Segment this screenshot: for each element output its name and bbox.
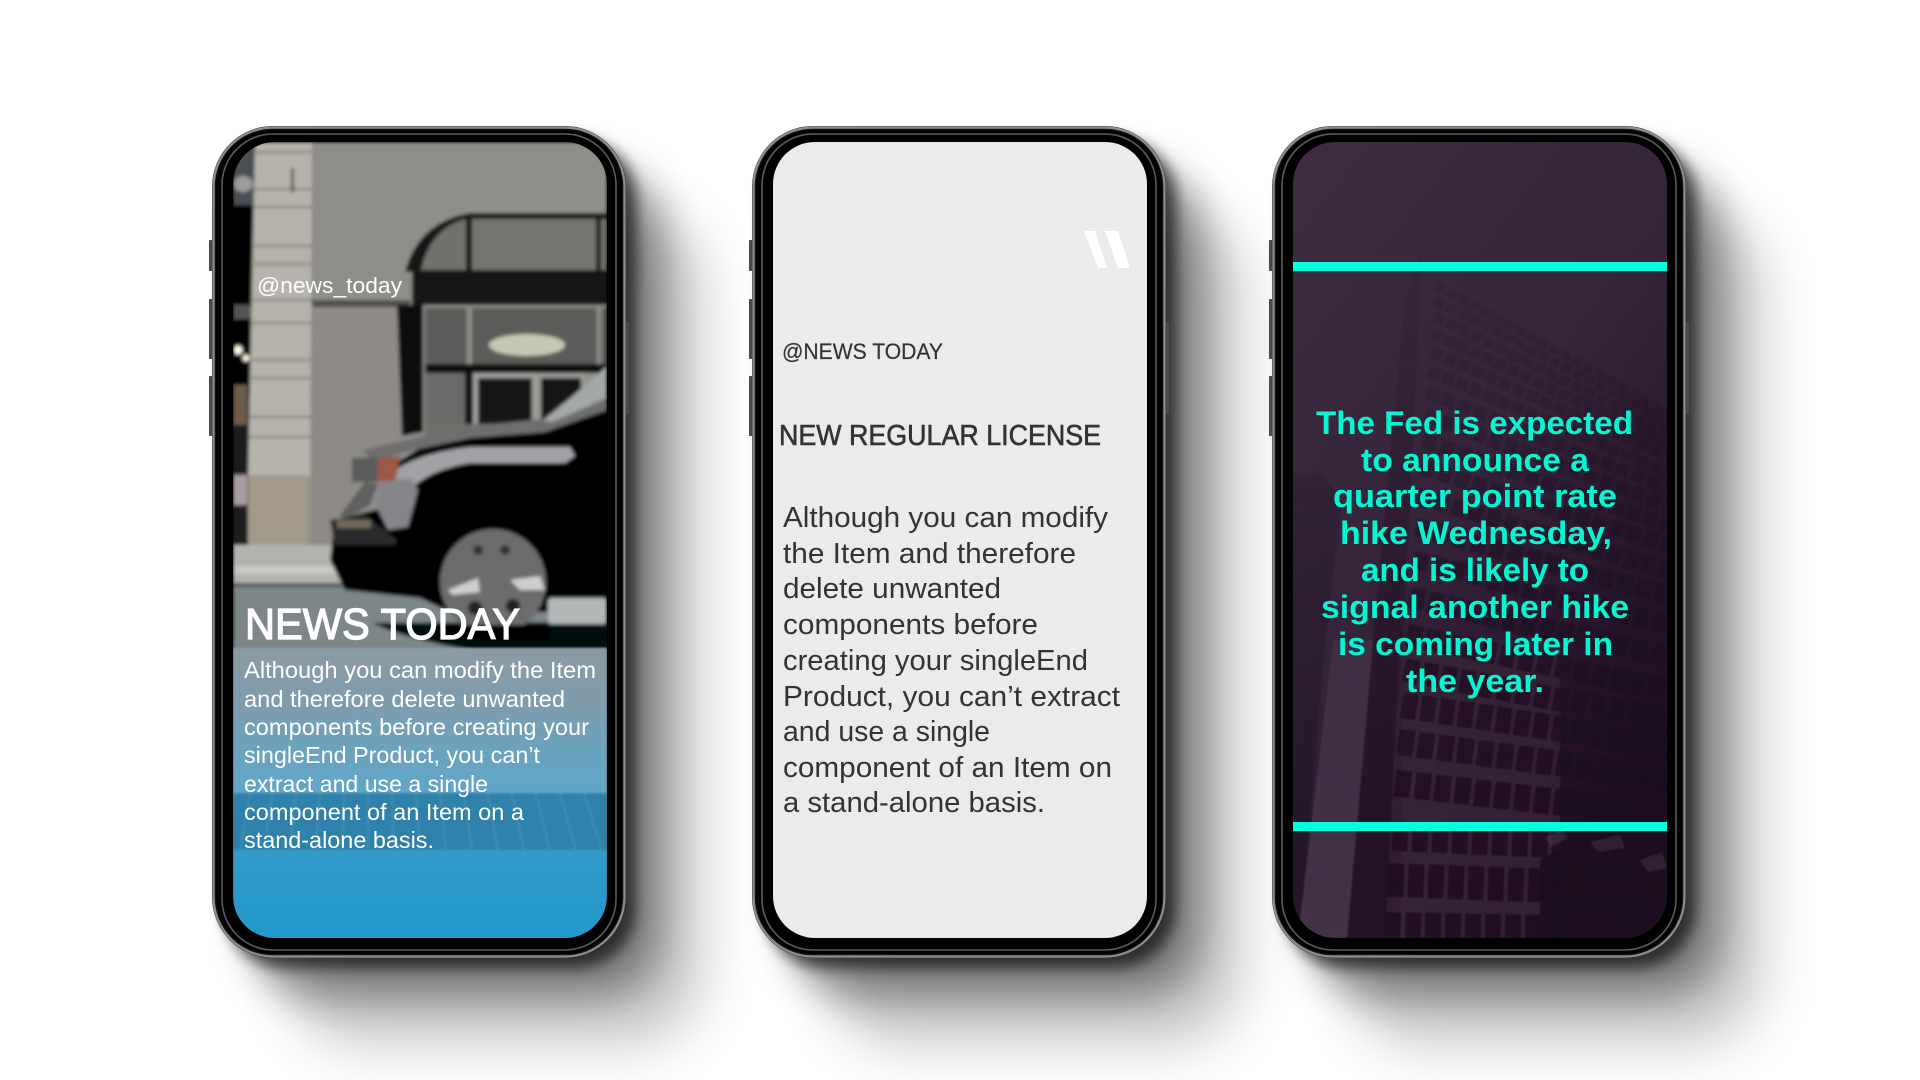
phone 1 body text: and therefore delete unwanted (244, 686, 565, 712)
top teal rule (1293, 262, 1667, 271)
road reflection (548, 598, 607, 624)
phone 2 body text: delete unwanted (783, 573, 1001, 605)
phone 2 body text: and use a single (783, 716, 990, 748)
sidewalk and road (233, 545, 363, 583)
phone 1: news today (209, 126, 629, 958)
phone 3 quote text: is coming later in (1338, 626, 1613, 662)
phone 3 shadow (1284, 138, 1762, 1044)
phone 2 body text (783, 502, 1120, 819)
phone 1 body text: extract and use a single (244, 771, 488, 797)
chrome strip (395, 447, 575, 488)
phone 2 screen (773, 142, 1147, 938)
hood (363, 398, 607, 462)
phone 1 body text (244, 657, 596, 853)
phone 1 screen photo: street and black car (233, 142, 607, 942)
phone 2 body text: the Item and therefore (783, 538, 1076, 570)
phone 3 quote text: hike Wednesday, (1340, 515, 1612, 551)
three phone mockups (209, 126, 1789, 1071)
phone 1 headline: NEWS TODAY (245, 600, 520, 649)
phone 1 body text: components before creating your (244, 714, 589, 740)
phone 2 heading: NEW REGULAR LICENSE (779, 420, 1101, 452)
phone 3 quote text: the year. (1406, 663, 1544, 699)
bumper (330, 515, 397, 545)
phone 2 body text: a stand-alone basis. (783, 787, 1045, 819)
arched window (405, 213, 607, 305)
icon: white slanted logo (1084, 231, 1130, 268)
windshield (543, 366, 607, 422)
phone 2 body text: creating your singleEnd (783, 645, 1088, 677)
phone 3: fed rate quote (1269, 126, 1689, 958)
phone 3 quote text: and is likely to (1361, 552, 1589, 588)
phone 3 quote text: quarter point rate (1333, 478, 1617, 514)
under-car shadow (372, 622, 607, 650)
blue gradient foot (233, 648, 607, 942)
phone 1 body text: component of an Item on a (244, 799, 524, 825)
phone 2 body text: components before (783, 609, 1038, 641)
phone 2: regular license (749, 126, 1169, 958)
phone 3 quote text: signal another hike (1321, 589, 1629, 625)
phone 1 body text: Although you can modify the Item (244, 657, 596, 683)
car body (330, 395, 607, 612)
phone 2 shadow (764, 138, 1242, 1044)
phone 1 body text: singleEnd Product, you can’t (244, 742, 541, 768)
phone 2 body text: Although you can modify (783, 502, 1109, 534)
headlight (378, 456, 400, 482)
phone 3 quote text (1316, 405, 1633, 699)
phone 1 body text: stand-alone basis. (244, 827, 434, 853)
bottom teal rule (1293, 822, 1667, 831)
phone 1 shadow (224, 138, 702, 1044)
phone 3 screen photo: tower in plum tint (1293, 142, 1667, 938)
phone 3 quote text: The Fed is expected (1316, 405, 1633, 441)
phone 1 handle: @news_today (257, 273, 402, 298)
phone 2 body text: component of an Item on (783, 752, 1112, 784)
phone 2 handle: @NEWS TODAY (782, 339, 943, 364)
wheel (440, 529, 546, 635)
phone 3 quote text: to announce a (1361, 442, 1589, 478)
phone 2 body text: Product, you can’t extract (783, 681, 1120, 713)
wall below ledge (372, 314, 406, 514)
